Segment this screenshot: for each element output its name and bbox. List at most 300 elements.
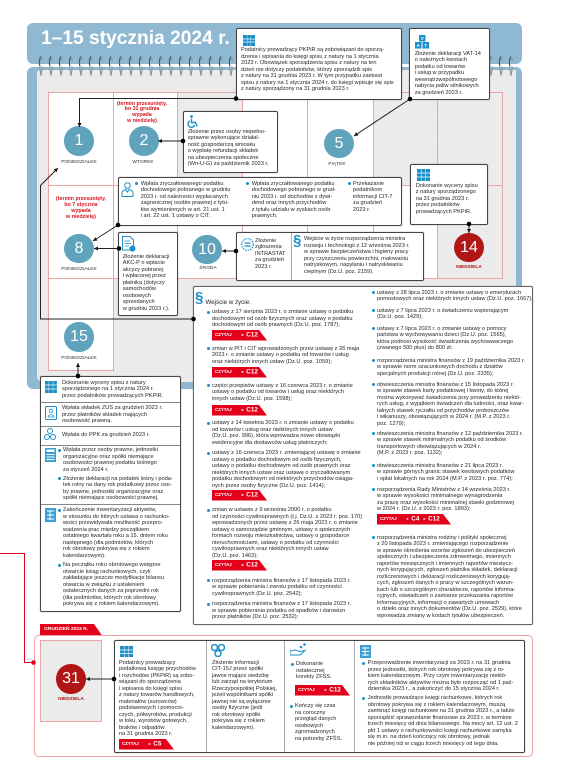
item: zmian w PIT i CIT wprowadzonych przez ustawę z 26 maja [212,346,359,352]
item: ewidencyjne dla dostawców usług płatniczych; [212,440,328,446]
item [212,601,351,620]
text: VAT-14 [414,51,481,96]
text: zamknięcie ksiąg: zamknąć księgi rachunkowe na 31 grudnia 2023 r., a także [368,708,514,714]
text: księgi: otwarcie ksiąg rachunkowych, czyli [63,568,150,574]
text: CIT-15J [212,660,277,730]
item: w sprawie pobierania podatku od spadków i darowizn [212,608,345,614]
item: ustawy o podatku od towarów i usług oraz niektórych [212,389,344,395]
text: ZUS [62,405,163,424]
item: obwieszczenia ministra finansów z 12 października 2023 r. [377,431,523,437]
day 8 [64,234,94,263]
text: remanent PKPiR: Podatnicy prowadzący PKPiR są zobowiązani do sporzą- [241,47,384,53]
text: ZUS: osobowość prawną. [62,418,112,424]
text: AKC-P: akcyzy pobranej [123,266,163,272]
text: CIT-15J: jeżeli wspólnikami spółki [212,692,273,698]
text: osoby niepełnosprawne [188,128,269,167]
text: PKPiR spis: braków i odpadów [119,724,164,730]
item [212,507,362,559]
text: inwentaryzacja: w stosunku do których ustawa o rachunko- [63,514,170,520]
item: 2023 r. o zmianie ustawy o podatku od towarów i usług [212,352,349,358]
icon: list [360,645,371,658]
item: wprowadzonych przez ustawę z 26 maja 2023 r. o zmianie [212,520,358,526]
item: która podnosi wysokość świadczenia wychowawczego [377,339,513,345]
text: VAT-14: o należnych kwotach [415,57,467,63]
text: księgi: ostatecznych danych za poprzedni rok [63,588,159,594]
header band with title [27,23,241,64]
day 15 [64,322,94,352]
icon: ZUS card [45,406,57,420]
item: obwieszczenia ministra finansów z 15 listopada 2023 r. [377,382,514,388]
note: 7 stycznia: bo 7 stycznia [64,202,98,208]
item: raportów miesięcznych i imiennych raportów miesięcz- [377,561,513,567]
label: poniedziałek: PONIEDZIAŁEK [61,267,97,272]
day 10: 10 [198,241,216,258]
icon: VAT blocks [415,35,429,48]
text: PKPiR spis [119,660,196,737]
text: PKPiR spis: czych, półwyrobów, produkcji [119,712,192,718]
divider [354,641,355,752]
item: pomostowych oraz niektórych innych ustaw (Dz.U. poz. 1667); [377,296,533,302]
item: w sprawie górnych granic stawek kwotowych podatków [377,469,515,475]
text: CIT-15J: kalendarzowym). [212,724,255,730]
item [212,383,353,402]
badge: czytaj C4 C12: ► C4 ► C12 [406,515,440,522]
text: ryczałt zagraniczny: 2023 r. od należności wypłacanych [141,194,228,200]
text: inwentaryzacja 2023: przez jednostki, których rok obrotowy pokrywa się z ro- [368,666,505,672]
item [377,463,515,482]
day 14 [454,233,484,262]
text: VAT-14: wewnątrzwspólnotowego [415,77,477,83]
text: dokonanie wyceny: na 31 grudnia 2023 r. [416,196,469,202]
day 1: 1 [75,132,83,149]
item: można wykonywać świadczenia przy prowadzeniu niektó- [377,395,521,401]
text: zamknięcie ksiąg: Jednostki prowadzące księgi rachunkowe, których rok [368,695,502,701]
text: wycena 15: sporządzonego na 1 stycznia 2024 r. [62,386,154,392]
text: AKC-P: osobowych [123,292,151,298]
badge: czytaj C12: ► C12 [241,368,258,375]
text: rozporządzenie BHP [304,236,410,274]
divider [284,641,285,752]
day 31 cell [40,640,102,722]
label: niedziela: NIEDZIELA [58,697,84,702]
divider [206,641,207,752]
day 31 [56,664,86,694]
text: CIT-15J: pokrywa się z rokiem [212,718,265,724]
badge: czytaj C12: CZYTAJ [215,492,232,497]
text: ryczałt zagraniczny: Wpłata zryczałtowanego podatku [141,180,223,186]
text: ZUS: przez płatników składek mających [62,412,147,418]
item: rozporządzenia ministra finansów z 19 października 2023 r. [377,358,525,364]
text: ryczałt zagraniczny: zagranicznej osobie prawnej z tytu- [141,200,229,206]
text: CIT-7: informacji CIT-7 [353,194,392,200]
item: rozporządzenia ministra finansów z 17 listopada 2023 r. [212,578,351,584]
badge: czytaj C5: CZYTAJ [122,741,139,746]
item: cywilnoprawnych oraz niektórych innych ustaw [212,546,329,552]
text: AKC-P: AKC-P o wpłacie [123,260,165,266]
item: w sprawie wysokości minimalnego wynagrodzenia [377,493,502,499]
text: przegląd danych [295,703,342,742]
day 31: 31 [62,670,80,687]
item: w sprawie norm szacunkowych dochodu z działów [377,364,503,370]
title: 1–15 stycznia 2024 r. [41,28,230,49]
day 5: 5 [335,135,343,152]
item [377,358,525,377]
day 8: 8 [75,240,83,256]
text: przegląd danych: Kończy się czas [295,703,335,709]
icon: books [120,646,133,657]
label: środa: ŚRODA [199,266,217,271]
icon: books [243,35,255,46]
text: korekta ZFŚS: ostatecznej [296,668,325,674]
text: PKPiR spis: materiałów (surowców) [119,698,177,704]
text: deklaracja leśna: tek rolny na dany rok podatkowy przez oso- [63,482,172,488]
panel: obowiązki 15 stycznia [40,376,180,612]
text: korekta ZFŚS: Dokonanie [296,661,323,667]
text: inwentaryzacja [63,507,170,559]
day 2 [129,126,159,156]
badge: czytaj C12: CZYTAJ [215,369,232,374]
note: 7 stycznia: w niedzielę) [66,214,96,220]
item [212,450,361,489]
text: ryczałt dywidendy: prawnych. [252,213,277,219]
item: (M.P. z 2023 r. poz. 1132); [377,450,442,456]
badge: czytaj C12 [212,490,267,500]
text: księgi: Na początku roku obrotowego wstępne [63,562,161,568]
badge: czytaj C12: ► C12 [241,561,258,568]
item: talnych stawek ryczałtu od przychodów proboszczów [377,408,509,414]
text: PKPiR spis: i rozchodów (PKPiR) są zobo- [119,672,194,678]
note: 7 stycznia [56,196,106,220]
item: obwieszczenia ministra finansów z 21 lipca 2023 r. [377,463,503,469]
text: osoby niepełnosprawne: na ubezpieczenia społeczne [188,154,259,160]
icon: PPK [44,428,56,440]
panel: AKC-P [118,232,178,316]
item: rozporządzenia ministra rodziny i polityki społecznej [377,535,506,541]
text: INTRASTAT: Złożenie [255,238,276,244]
item: transportowych obowiązujących w 2024 r. [377,444,481,450]
text: rozporządzenie BHP: natryskowym, napylaniu i natryskiwaniu [304,262,403,268]
text: CIT-15J: jawnej nie są wyłącznie [212,698,271,704]
text: CIT-15J: CIT-15J przez spółki [212,666,263,672]
text: księgi: pokrywa się z rokiem kalendarzowym). [63,601,160,607]
item: specjalnych produkcji rolnej (Dz.U. poz. 2335); [377,371,493,377]
badge: czytaj C5 [119,739,174,750]
item [377,326,513,352]
badge: czytaj C12: ► C12 [241,331,258,338]
text: PKPiR spis: w toku, wyrobów gotowych, [119,718,188,724]
text: INTRASTAT: zgłoszenia [255,244,282,250]
spiral binding [38,56,513,76]
item: (Dz.U. poz. 1463); [212,552,258,558]
badge: czytaj C12: CZYTAJ [215,332,232,337]
icon: VAT blocks: V [421,36,425,42]
item: ustawy z 17 sierpnia 2023 r. o zmianie ustawy o podatku [212,309,353,315]
panel: remanent PKPiR [236,28,402,100]
note: 31 grudnia: (termin przesunięty, [117,100,167,106]
item [377,290,533,303]
item: (Dz.U. poz. 996), która wprowadza nowe obowiązki [212,433,340,439]
text: VAT-14: podatku od towarów [415,64,465,70]
icon: calculator [45,448,56,462]
text: PKPiR spis: na 31 grudnia 2023 r. [119,731,172,737]
note: 31 grudnia [117,100,167,124]
item: od czynności cywilnoprawnych (t.j. Dz.U. z 2023 r. poz. 170) [212,514,362,520]
text: inwentaryzacja: Zakończenie inwentaryzacji aktywów, [63,507,156,513]
text: deklaracja leśna: by prawne, jednostki organizacyjne oraz [63,488,163,494]
day 14: 14 [460,239,478,256]
text: rozporządzenie BHP: przy czyszczeniu powierzchni, malowaniu [304,256,408,262]
heading: wejście w życie: Wejście w życie: [206,298,251,306]
badge: czytaj C12: ► C12 [241,491,258,498]
text: CIT-15J: Złożenie informacji [212,660,259,666]
label: niedziela: NIEDZIELA [456,265,482,270]
item: ustawy z 28 lipca 2023 r. o zmianie ustawy o emeryturach [377,290,521,296]
item: w sprawie stawek minimalnych podatku od środków [377,437,506,443]
badge: czytaj C12 [295,685,350,696]
text: remanent PKPiR: dzenia i wpisania do księgi spisu z natury na 1 stycznia [241,54,379,60]
icon: document [122,236,136,252]
text: remanent PKPiR: z natury na 31 grudnia 2023 r. W tym przypadku zamiast [241,73,382,79]
item: informacyjnych, informacji o zawartych umowach [377,600,499,606]
text: ryczałt dywidendy [252,180,336,220]
text: ryczałt zagraniczny: dochodowego pobranego w grudniu [141,187,230,193]
item: ustawy o podatku dochodowym od osób fizycznych, [212,456,342,462]
text: PPK: Wpłata do PPK za grudzień 2023 r. [62,432,150,438]
text: AKC-P: i wpłaconej przez [123,273,166,279]
text: podatek leśny [63,447,158,473]
badge: czytaj C12: ► C12 [324,686,341,693]
divider row 3 [40,445,180,505]
item: społecznych i ubezpieczenia zdrowotnego, imiennych [377,554,511,560]
item: oraz niektórych innych ustaw (Dz.U. poz. 1059); [212,359,332,365]
item: cyjnych, oświadczeń o zamiarze przekazania raportów [377,593,513,599]
day 2: 2 [140,132,148,149]
header band right part [241,23,522,64]
icon: VAT blocks: A [416,42,420,48]
item: kach lub o szczególnym charakterze, raportów informa- [377,587,515,593]
item: i opłat lokalnych na rok 2024 (M.P. z 2023 r. poz. 774); [377,476,513,482]
panel: VAT-14 [409,28,490,100]
note: 31 grudnia: wypada [132,112,152,118]
item: w sprawie stawek karty podatkowej i kwoty, do której [377,388,508,394]
text: AKC-P: samochodów [123,286,156,292]
icon: hand ZFŚS [290,643,307,656]
item: za pracę oraz wysokości minimalnej stawki godzinowej [377,500,514,506]
text: osoby niepełnosprawne: sprawne wykonujące działal- [188,135,260,141]
text: PKPiR spis: z natury towarów handlowych, [119,692,195,698]
text: podatek leśny: za styczeń 2024 r. [63,466,108,472]
note: 31 grudnia: bo 31 grudnia [125,106,159,112]
badge: czytaj C12: CZYTAJ [215,562,232,567]
icon: paragraph: § [293,232,301,249]
text: księgi [63,562,164,608]
item: niektórych innych ustaw oraz ustawę o zryczałtowanym [212,470,350,476]
text: ryczałt dywidendy: dend oraz innych przychodów [252,200,326,206]
text: inwentaryzacja: ostatniego kwartału roku a 15. dniem roku [63,533,168,539]
text: ryczałt zagraniczny: łów wymienionych w art. 21 ust. 1 [141,206,225,212]
text: księgi: otwarcia w związku z ustaleniem [63,582,145,588]
text: rozporządzenie BHP: cieplnym (Dz.U. poz. 2159). [304,268,374,274]
icon: books [417,169,430,181]
text: dokonanie wyceny: z natury sporządzonego [416,189,476,195]
badge: czytaj C12: CZYTAJ [298,687,315,692]
item [377,535,522,619]
text: inwentaryzacja 2023 [368,660,513,692]
text: wycena 15 [62,380,163,398]
badge: czytaj C4 C12 [377,514,451,524]
text: PKPiR spis: wiązani do sporządzenia [119,679,181,685]
text: INTRASTAT: 2023 r. [255,264,272,270]
item: zmian w ustawie z 9 września 2000 r. o podatku [212,507,331,513]
item: o dzieło oraz innych dokumentów (Dz.U. poz. 2529), które [377,606,522,612]
text: osoby niepełnosprawne: ność gospodarczą wniosku [188,142,255,148]
item [377,487,514,513]
text: inwentaryzacja: rok obrotowy pokrywa się z rokiem [63,546,150,552]
item: innych ustaw (Dz.U. poz. 1598); [212,396,292,402]
icon: paragraph: § [195,289,203,306]
divider [291,233,292,280]
calendar page [37,70,516,382]
item [212,420,354,446]
panel: INTRASTAT and rozporządzenie [236,232,424,281]
item: cywilnoprawnych (Dz.U. poz. 2542); [212,591,302,597]
badge: czytaj C12 [212,560,267,570]
text: VAT-14: Złożenie deklaracji VAT-14 [415,51,481,57]
text: VAT-14: nabycia paliw silnikowych [415,83,479,89]
text: osoby niepełnosprawne: Złożenie przez osoby niepełno- [188,128,266,134]
text: ryczałt dywidendy: niu 2023 r. od dochodów z dywi- [252,194,332,200]
text: korekta ZFŚS [296,661,332,680]
text: rozporządzenie BHP: rozwoju i technologii z 12 września 2023 r. [304,242,410,248]
item: ustawy o podatku dochodowym od osób prawnych oraz [212,463,351,469]
item: rozporządzenia Rady Ministrów z 14 września 2023 r. [377,487,511,493]
text: PKPiR spis: podatkową księgę przychodów [119,666,196,672]
item: cych, zgłoszeń danych o pracy w szczególnych warun- [377,580,514,586]
tab: grudzień 2023: GRUDZIEŃ 2023 R. [44,627,88,632]
item [377,382,524,427]
text: rozporządzenie BHP: w sprawie bezpieczeństwa i higieny pracy [304,249,408,255]
panel: osoby niepełnosprawne [183,111,278,172]
item: państwa w wychowywaniu dzieci (Dz.U. poz. 1565), [377,332,506,338]
text: wycena 15: przez podatników prowadzących PKPiR. [62,392,163,398]
item: ustawy z 7 lipca 2023 r. o zmianie ustawy o pomocy [377,326,506,332]
text: remanent PKPiR: z natury sporządzony na 31 grudnia 2023 r. [241,86,350,92]
text: remanent PKPiR: dzień nie dotyczy podatników, którzy sporządzili spis [241,66,372,72]
text: przegląd danych: przegląd danych [295,716,336,722]
text: zamknięcie ksiąg [368,695,518,747]
item: poz. 1279); [377,421,405,427]
text: inwentaryzacja 2023: dziernika 2023 r., a zakończyć do 15 stycznia 2024 r. [368,686,500,692]
item: dochodowym od osób prawnych (Dz.U. poz. 1787); [212,322,340,328]
item: wprowadza zmiany w kodach tytułów ubezpieczeń. [377,613,504,619]
text: VAT-14: za grudzień 2023 r. [415,90,463,96]
text: PKPiR spis: podstawowych i pomocni- [119,705,184,711]
text: deklaracja leśna: Złożenie deklaracji na podatek leśny i poda- [63,476,173,482]
label: poniedziałek: PONIEDZIAŁEK [61,160,97,165]
badge: czytaj C12: ► C12 [241,406,258,413]
label: piątek: PIĄTEK [328,162,346,167]
text: podatek leśny: organizacyjne oraz spółki niemające [63,454,154,460]
text: deklaracja leśna: spółki niemające osobowości prawnej. [63,495,159,501]
text: zamknięcie ksiąg: sporządzić sprawozdanie finansowe za 2023 r. w terminie [368,714,512,720]
text: inwentaryzacja 2023: rych składników aktywów można było rozpocząć od 1 paź- [368,680,513,686]
item: ustawy z 7 lipca 2023 r. o świadczeniu wspierającym [377,308,508,314]
panel: dokonanie wyceny [410,164,488,224]
icon: person [122,182,134,197]
text: inwentaryzacja 2023: kiem kalendarzowym. Przy czym inwentaryzację niektó- [368,673,507,679]
note: 7 stycznia: (termin przesunięty, [56,196,106,202]
text: AKC-P: Złożenie deklaracji [123,254,169,260]
icon: books [45,381,57,393]
text: INTRASTAT: za grudzień [255,257,284,263]
text: podatek leśny: Wpłata przez osoby prawne, jednostki [63,447,158,453]
badge: czytaj C12 [212,367,267,378]
text: przegląd danych: na potrzeby ZFŚS. [295,736,342,742]
text: wycena 15: Dokonanie wyceny spisu z natury [62,380,146,386]
text: CIT-7: 2023 r. [353,206,370,212]
text: rozporządzenie BHP: Wejście w życie rozporządzenia ministra [304,236,405,242]
item: rozporządzenia ministra finansów z 17 listopada 2023 r. [212,601,351,607]
text: CIT-7: podatnikom [353,187,382,193]
item: nych przez osoby fizyczne (Dz.U. poz. 1414); [212,482,325,488]
text: INTRASTAT: INTRASTAT [255,250,286,256]
text: CIT-15J: Rzeczypospolitej Polskiej, [212,686,277,692]
day 15: 15 [70,328,88,345]
day 1 [64,126,94,156]
text: PKPiR spis: i wpisania do księgi spisu [119,686,182,692]
item: od towarów i usług oraz niektórych innych ustaw [212,426,333,432]
text: przegląd danych: na coroczny [295,710,325,716]
panel: podatki 8 stycznia [118,177,402,226]
text: zamknięcie ksiąg: obrotowy pokrywa się z rokiem kalendarzowym, muszą [368,702,505,708]
badge: czytaj C12 [212,330,267,340]
text: inwentaryzacja: kalendarzowym). [63,552,106,558]
text: ryczałt dywidendy: z tytułu udziału w zyskach osób [252,206,330,212]
text: CIT-7 [353,180,392,213]
item: i wikariuszy, obowiązujących w 2024 r. (M.P. z 2023 r. [377,414,510,420]
item: w 2024 r. (Dz.U. z 2023 r. poz. 1893); [377,506,470,512]
item [212,578,351,597]
text: inwentaryzacja: następnego (dla podmiotów, których [63,540,153,546]
item: rych usług, z wyjątkiem świadczeń dla ludności, oraz kwar- [377,401,524,407]
day 10 [192,235,222,264]
panel: grudzień obowiązki [114,640,524,752]
icon: INTRASTAT [241,238,254,251]
item: ustawy z 16 czerwca 2023 r. zmieniającej ustawę o zmianie [212,450,361,456]
item: ustawy o samorządzie gminnym, ustawy o społecznych [212,526,350,532]
text: podatek leśny: osobowości prawnej podatku leśnego [63,460,157,466]
icon: list [45,508,56,522]
text: AKC-P: płatnika (dotyczy [123,280,165,286]
text: przegląd danych: osobowych [295,722,323,728]
text: CIT-7: za grudzień [353,200,382,206]
text: zamknięcie ksiąg: się m.in. na dzień kończący rok obrotowy, jednak [368,734,490,740]
text: PKPiR spis: Podatnicy prowadzący [119,660,175,666]
panel: wejście w życie [193,286,533,624]
panel: grudzień frame [34,635,533,756]
item: (zwanego 500 plus) do 800 zł; [377,345,452,351]
text: dokonanie wyceny: prowadzących PKPiR. [416,208,472,214]
item: rozliczeniowych i deklaracji rozliczeniowych korygują- [377,574,511,580]
text: inwentaryzacja: wości przewidywała możliwość przepro- [63,520,163,526]
item: przez płatników (Dz.U. poz. 2532); [212,614,298,620]
label: wtorek: WTOREK [132,160,154,165]
note: 7 stycznia: wypada [71,208,91,214]
item: dochodowym od osób fizycznych oraz ustawy o podatku [212,316,352,322]
text: CIT-15J: osoby fizyczne (jeśli [212,705,262,711]
badge: czytaj C12 [212,405,267,416]
text: CIT-15J: lub zarząd na terytorium [212,679,273,685]
